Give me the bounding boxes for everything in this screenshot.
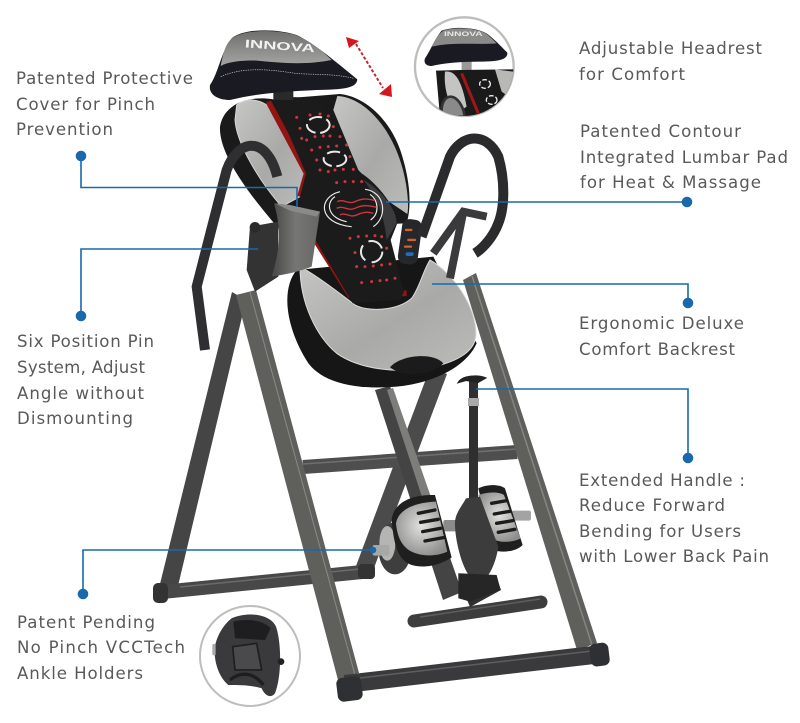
callout line: pin system <box>76 249 258 320</box>
left ankle holder <box>373 495 460 574</box>
cross bar <box>303 449 517 467</box>
lumbar massage pad <box>275 97 404 303</box>
text: backrest <box>579 314 744 359</box>
inset: headrest close-up: INNOVA <box>444 31 483 38</box>
right ankle holder <box>455 485 531 602</box>
text: handle: with Lower Back Pain <box>579 547 769 566</box>
rear right leg <box>356 368 447 568</box>
heat waves <box>337 199 377 216</box>
left pivot mechanism <box>247 222 278 292</box>
remote control <box>397 218 423 265</box>
text: ankle holders: No Pinch VCCTech <box>17 638 185 657</box>
text: headrest <box>579 39 762 84</box>
text: ankle holders: Ankle Holders <box>17 664 143 683</box>
inset: headrest close-up <box>415 17 514 117</box>
text: lumbar pad: Integrated Lumbar Pad <box>580 148 788 167</box>
left main leg <box>236 290 359 680</box>
text: lumbar pad <box>580 122 788 192</box>
callout line: ankle holders <box>78 548 376 598</box>
rear floor bar <box>153 564 375 603</box>
text: pin system: Angle without <box>17 384 144 403</box>
text: pin system: Six Position Pin <box>17 332 154 351</box>
right hand tube <box>422 139 503 278</box>
inversion table frame <box>153 273 610 702</box>
inset: ankle holder close-up <box>200 606 300 706</box>
text: backrest: Ergonomic Deluxe <box>579 314 744 333</box>
text: handle: Reduce Forward <box>579 496 725 515</box>
left hand tube <box>197 146 277 350</box>
text: ankle holders <box>17 613 185 683</box>
text: headrest: Adjustable Headrest <box>579 39 762 58</box>
callout line: protective cover <box>76 152 297 207</box>
red trim stripe <box>268 102 407 295</box>
text: handle: Bending for Users <box>579 522 741 541</box>
text: lumbar pad: for Heat & Massage <box>580 173 761 192</box>
callout line: handle <box>476 389 692 462</box>
text: protective cover: Prevention <box>16 120 113 139</box>
text: lumbar pad: Patented Contour <box>580 122 741 141</box>
foot bar <box>414 576 541 621</box>
extended handle <box>459 376 485 498</box>
front floor bar <box>336 642 610 702</box>
ankle holders <box>373 485 531 602</box>
text: pin system: Dismounting <box>17 409 133 428</box>
text: protective cover <box>16 69 193 139</box>
heat dots <box>297 114 395 283</box>
seat lower section <box>287 257 477 387</box>
text: handle: Extended Handle : <box>579 471 745 490</box>
pinch protective cover <box>272 203 320 277</box>
headrest <box>210 30 357 100</box>
centre beam <box>375 386 462 600</box>
text: headrest: for Comfort <box>579 65 685 84</box>
backrest upper section <box>220 94 410 230</box>
brand logo: INNOVA <box>244 38 315 55</box>
right main leg <box>463 273 597 650</box>
text: protective cover: Cover for Pinch <box>16 95 155 114</box>
massage rings <box>307 117 383 262</box>
text: pin system <box>17 332 154 428</box>
backrest and lumbar pad <box>197 30 503 387</box>
callout line: backrest <box>432 284 692 308</box>
text: handle <box>579 471 769 566</box>
double-headed red arrow <box>346 37 392 97</box>
callout line: lumbar pad <box>386 198 692 206</box>
text: backrest: Comfort Backrest <box>579 340 735 359</box>
text: protective cover: Patented Protective <box>16 69 193 88</box>
text: ankle holders: Patent Pending <box>17 613 155 632</box>
rear left leg <box>159 292 246 588</box>
text: pin system: System, Adjust <box>17 358 145 377</box>
